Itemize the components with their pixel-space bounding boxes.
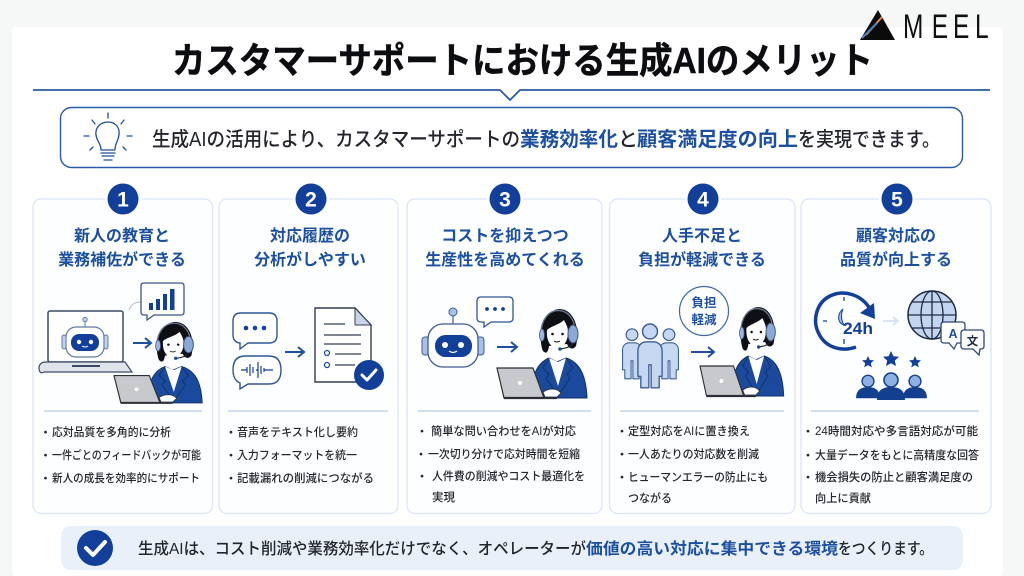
icon: document [315,308,371,382]
bullet list 4: ・ [616,426,628,438]
bullet list 2: ・ [226,450,236,462]
bullet list 3 [416,424,585,504]
intro text: 生成AIの活用により、カスタマーサポートの [152,128,520,151]
conclusion text [138,539,933,558]
operator [497,309,587,398]
heading 1 [58,226,186,269]
bullet list 1: 応対品質を多角的に分析 [52,425,171,439]
heading 5: 顧客対応の [856,227,936,245]
bullet list 1: 一件ごとのフィードバックが可能 [52,448,201,462]
intro text [152,128,940,151]
callout: reduced burden [680,286,728,336]
number badge 1: 1 [117,188,129,212]
icon: group of people [623,324,678,388]
panel: merit 5 [801,181,991,514]
panel: merit 4 [610,181,795,514]
arrow [497,342,517,352]
callout: reduced burden: 軽減 [691,312,717,327]
divider [620,410,784,412]
icon: check circle [77,530,113,566]
conclusion text: をつくります。 [838,540,933,558]
bullet list 2: 記載漏れの削減につながる [237,471,374,485]
heading 4: 負担が軽減できる [638,250,766,269]
bullet list 1: 新人の成長を効率的にサポート [52,471,200,485]
panel: merit 1 [33,181,212,514]
bullet list 2: 入力フォーマットを統一 [237,448,357,462]
bullet list 3: 人件費の削減やコスト最適化を [432,469,585,483]
icon: check badge [354,360,384,390]
panel: merit 3 [407,181,602,514]
bullet list 2: ・ [226,427,236,439]
illustration: robot laptop to operator [39,283,202,403]
bullet list 3: ・ [416,426,428,438]
divider [811,410,979,412]
heading 2 [254,227,366,269]
bullet list 2 [226,425,374,485]
number badge 4 [685,181,721,217]
intro text: 業務効率化 [520,128,618,151]
icon: translation bubbles: 文 [967,334,979,348]
heading 4: 人手不足と [662,226,742,245]
divider [44,410,202,412]
bullet list 4: ヒューマンエラーの防止にも [628,470,768,484]
bullet list 5: 24時間対応や多言語対応が可能 [815,424,978,438]
number badge 3: 3 [499,188,511,212]
bullet list 5: 向上に貢献 [815,491,871,505]
heading 4 [638,226,766,269]
heading 5 [840,227,952,269]
bullet list 5: ・ [802,450,814,462]
icon: customers with stars [856,351,927,400]
number badge 1 [105,181,141,217]
bullet list 4: 一人あたりの対応数を削減 [628,447,759,461]
icon: voice bubble [233,356,281,389]
number badge 2: 2 [305,188,317,212]
callout: reduced burden: 負担 [691,295,717,310]
operator [114,322,202,403]
panel: intro message [60,108,962,168]
divider [228,410,388,412]
bullet list 5: ・ [802,472,814,484]
logo wordmark: MEEL [903,8,989,46]
bullet list 3: 簡単な問い合わせをAIが対応 [431,424,576,438]
illustration: 24h, multilingual, satisfied customers [816,291,984,400]
conclusion text: 生成AIは、コスト削減や業務効率化だけでなく、オペレーターが [138,539,586,558]
arrow [691,347,714,357]
heading 2: 分析がしやすい [254,250,366,269]
bullet list 4 [616,424,768,505]
heading 1: 業務補佐ができる [58,250,186,269]
icon: 24h clock: 24h [843,319,873,338]
arrow [285,347,304,357]
operator [700,307,784,396]
bullet list 3: ・ [416,449,426,461]
intro text: と [618,129,638,151]
bullet list 3: 実現 [432,490,455,504]
panel: conclusion bar [61,526,963,570]
bullet list 3: ・ [416,471,428,483]
illustration: reduced workload [623,286,784,396]
number badge 5: 5 [891,188,903,212]
heading 3: 生産性を高めてくれる [425,250,585,269]
icon: robot [422,308,484,367]
bullet list 5: ・ [802,426,814,438]
icon: translation bubbles [941,322,984,355]
number badge 3 [487,181,523,217]
bullet list 2: 音声をテキスト化し要約 [237,425,358,439]
bullet list 5 [802,424,979,505]
panel: merit 2 [219,181,398,514]
bullet list 1: ・ [40,450,51,462]
intro text: を実現できます。 [798,128,940,151]
icon: laptop with robot [39,311,132,373]
icon: speech bubble [477,297,513,327]
intro text: 顧客満足度の向上 [637,128,798,151]
heading 3: コストを抑えつつ [441,227,569,245]
arrow [133,338,151,348]
icon: translation bubbles: A [948,327,958,341]
bullet list 4: つながる [628,491,672,505]
bullet list 1 [40,425,201,485]
number badge 2 [293,181,329,217]
bullet list 5: 機会損失の防止と顧客満足度の [815,470,973,484]
bullet list 1: ・ [40,473,51,485]
bullet list 4: ・ [616,449,628,461]
arrow (light) [883,317,898,325]
title: カスタマーサポートにおける生成AIのメリット [172,40,873,81]
bullet list 2: ・ [226,473,236,485]
icon: chat bubble [233,313,277,349]
icon: light bulb [84,113,132,160]
heading 2: 対応履歴の [270,227,350,245]
icon: globe [908,291,956,339]
logo mark [860,10,895,40]
logo [860,8,989,46]
illustration: conversation to document [233,308,384,390]
heading 3 [425,227,585,269]
bullet list 4: ・ [616,472,628,484]
icon: chart bubble [129,283,184,320]
conclusion text: 価値の高い対応に集中できる環境 [586,539,838,558]
heading 1: 新人の教育と [74,226,170,245]
title divider with notch [33,90,990,100]
bullet list 1: ・ [40,427,51,439]
number badge 5 [879,181,915,217]
icon: 24h clock [816,293,875,349]
divider [418,410,591,412]
illustration: robot to operator [422,297,587,398]
heading 5: 品質が向上する [840,250,952,269]
bullet list 5: 大量データをもとに高精度な回答 [815,448,979,462]
number badge 4: 4 [697,188,709,212]
bullet list 4: 定型対応をAIに置き換え [628,424,750,438]
bullet list 3: 一次切り分けで応対時間を短縮 [428,447,580,461]
